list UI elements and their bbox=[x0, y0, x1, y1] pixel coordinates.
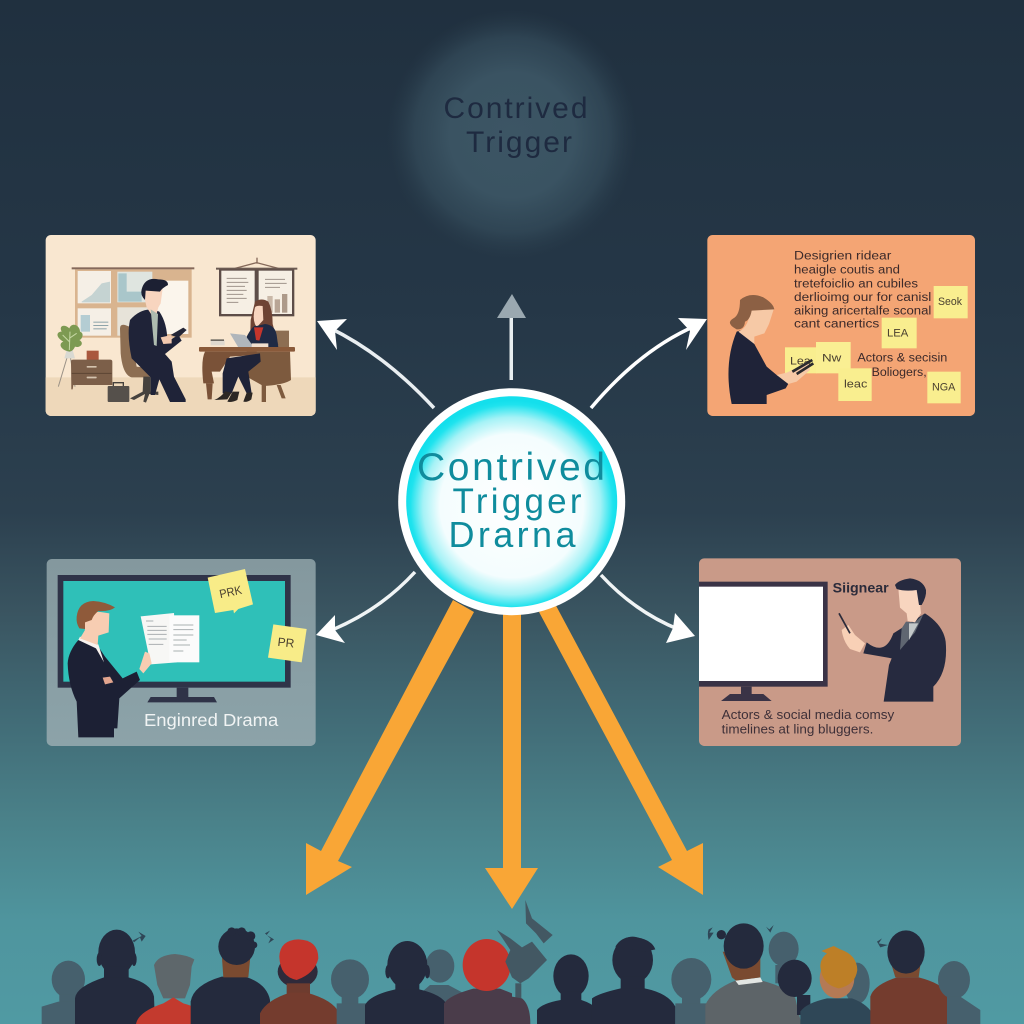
sticky note PR: PR bbox=[277, 635, 295, 651]
panel caption: timelines at ling bluggers. bbox=[722, 723, 873, 737]
person: dark with arrow bbox=[75, 930, 155, 1024]
man pointing with pen bbox=[839, 578, 946, 702]
wall board with documents bbox=[216, 258, 297, 316]
person: red head bbox=[444, 939, 512, 1024]
panel caption: Enginred Drama bbox=[144, 710, 278, 730]
arrow: upper left bbox=[317, 319, 434, 408]
sticky note PRK: PRK bbox=[218, 583, 243, 601]
person: curly hair bbox=[191, 927, 274, 1024]
presenter in suit bbox=[68, 601, 152, 737]
sticky note PRK bbox=[208, 569, 253, 613]
man with tablet on chair bbox=[120, 279, 187, 403]
person: grey hair red shirt bbox=[136, 954, 212, 1024]
person: dark with quiff bbox=[592, 937, 675, 1024]
arrow: lower right bbox=[601, 575, 695, 643]
orange arrow: right bbox=[539, 600, 703, 895]
top node label: Trigger bbox=[466, 126, 572, 159]
sticky notes bbox=[785, 286, 968, 403]
person: grey mid row bbox=[331, 959, 369, 1024]
central title: Drarna bbox=[448, 514, 576, 555]
sticky notes: Nw bbox=[822, 352, 842, 364]
sticky notes: NGA bbox=[932, 381, 956, 393]
person: grey mid bbox=[671, 958, 711, 1024]
orange arrow: centre bbox=[485, 600, 538, 909]
sticky notes: Lea bbox=[790, 356, 811, 368]
person: red head shoulder bbox=[512, 997, 530, 1024]
orange arrow: left bbox=[306, 600, 474, 895]
sticky note PR bbox=[268, 624, 307, 662]
side cabinet bbox=[71, 351, 112, 389]
briefcase bbox=[108, 383, 129, 402]
open document bbox=[141, 613, 199, 664]
arrow: upper right bbox=[591, 318, 707, 408]
panel text block: cant canertics bbox=[794, 317, 879, 331]
sticky notes: Seok bbox=[938, 296, 963, 308]
panel text block: tretefoiclio an cubiles bbox=[794, 276, 918, 290]
central circle bbox=[398, 388, 625, 615]
central title: Trigger bbox=[452, 482, 582, 521]
screen heading: Siignear bbox=[833, 579, 889, 595]
woman with phone bbox=[728, 295, 813, 404]
central title: Contrived bbox=[417, 446, 605, 489]
panel: office meeting bbox=[46, 235, 316, 416]
panel text block: derlioimg our for canisl bbox=[794, 290, 931, 304]
secondary text: Actors & secisin bbox=[857, 350, 947, 364]
sticky notes: leac bbox=[844, 378, 868, 390]
arrow: up bbox=[497, 294, 526, 380]
person: grey back right bbox=[417, 949, 464, 1007]
white monitor bbox=[699, 582, 828, 701]
plant on stand bbox=[57, 325, 83, 387]
panel caption: Actors & social media comsy bbox=[722, 708, 895, 722]
monitor bbox=[58, 575, 291, 702]
person: dark front bbox=[778, 960, 812, 1015]
person: dark bbox=[365, 941, 447, 1024]
person: grey right bbox=[938, 961, 980, 1024]
window with charts bbox=[72, 267, 194, 338]
panel text block: Desigrien ridear bbox=[794, 248, 891, 262]
panel: engineered drama screen bbox=[47, 559, 316, 746]
person: grey coat bbox=[705, 923, 801, 1024]
panel text block: aiking aricertalfe sconal bbox=[794, 304, 931, 318]
panel: signer at screen bbox=[699, 558, 961, 746]
person: red cap bbox=[260, 939, 339, 1024]
top faded node: Contrived Trigger bbox=[387, 10, 637, 260]
audience: right half bbox=[497, 900, 980, 1024]
person: orange hair bbox=[800, 946, 875, 1024]
person: grey back bbox=[769, 932, 799, 983]
woman at desk bbox=[199, 299, 295, 402]
camera on tripod bbox=[497, 900, 553, 998]
audience: left half bbox=[42, 927, 512, 1024]
person: brown shirt bbox=[870, 930, 947, 1024]
panel text block: heaigle coutis and bbox=[794, 262, 900, 276]
person: dark small bbox=[537, 954, 599, 1024]
arrow: lower left bbox=[316, 572, 415, 643]
sticky notes: LEA bbox=[887, 328, 909, 340]
secondary text: Boliogers, bbox=[872, 365, 927, 379]
person: grey back row bbox=[42, 961, 87, 1024]
top node label: Contrived bbox=[444, 92, 588, 125]
panel: designing posts with sticky notes bbox=[707, 235, 975, 416]
